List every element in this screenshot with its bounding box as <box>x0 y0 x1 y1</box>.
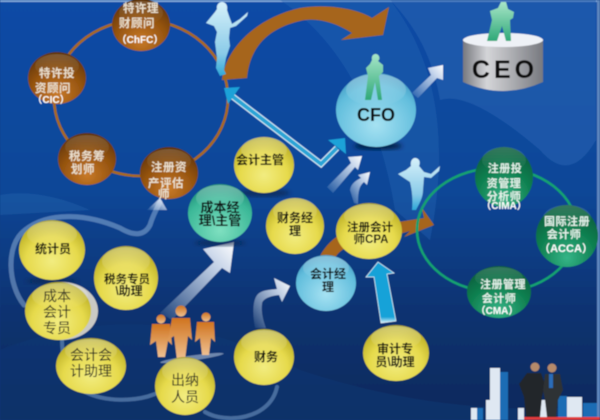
node: accounting assistant: 计助理 <box>70 363 112 379</box>
node: tax specialist: \助理 <box>115 284 143 298</box>
brown curved arrow to CEO <box>222 6 389 80</box>
node: asset appraiser <box>140 147 198 201</box>
node: CIMA: 资管理 <box>487 176 521 190</box>
node: CMA: 注册管理 <box>480 277 526 291</box>
node: tax planner <box>58 133 116 185</box>
node: finance manager: 财务经 <box>277 210 313 225</box>
node: auditor: 审计专 <box>377 341 413 356</box>
ring: brown planner certifications <box>54 20 228 176</box>
people icon <box>150 306 224 365</box>
city and businessmen <box>471 362 600 420</box>
businessman left <box>519 362 545 417</box>
node: CPA: 注册会计 <box>347 220 393 234</box>
light blue zigzag arrow <box>224 87 346 164</box>
node: CIMA: 分析师 <box>487 189 521 203</box>
node: accounting assistant <box>56 338 126 394</box>
node: tax specialist: 税务专员 <box>104 272 150 286</box>
node: finance manager: 理 <box>289 224 301 238</box>
node: tax specialist <box>94 246 158 310</box>
node: CIC <box>28 52 86 106</box>
node: CMA: （CMA） <box>476 305 518 317</box>
node: CIMA: （CIMA） <box>481 200 527 212</box>
node: ACCA: 国际注册 <box>544 214 590 228</box>
node: cashier: 人员 <box>171 389 199 405</box>
figure on CFO <box>365 54 383 100</box>
businessman right <box>543 364 563 417</box>
node: asset appraiser: 师 <box>158 188 170 201</box>
CEO cylinder: CEO <box>472 56 538 84</box>
CFO sphere: CFO <box>357 105 395 125</box>
node: cashier: 出纳 <box>171 372 199 388</box>
node: CIC: 资顾问 <box>35 81 71 95</box>
node: accounting assistant: 会计会 <box>70 347 112 363</box>
node: statistician <box>19 220 85 284</box>
blue up arrow to CPA <box>366 262 396 323</box>
node: cashier <box>155 357 215 415</box>
node: CPA <box>336 203 402 259</box>
node: finance <box>234 329 294 385</box>
node: ChFC <box>112 0 170 51</box>
node: cost specialist: 会计 <box>43 304 71 320</box>
node: CIC: 特许投 <box>39 66 75 80</box>
node: auditor: 员\助理 <box>375 355 415 369</box>
node: CMA <box>467 266 531 318</box>
node: accounting supervisor <box>234 137 294 197</box>
node: tax planner: 划师 <box>71 162 95 176</box>
ring: green management certifications <box>417 168 577 292</box>
node: accounting manager: 理 <box>322 280 334 294</box>
node: ChFC: 财顾问 <box>119 16 155 30</box>
node: CPA: 师CPA <box>354 233 388 246</box>
node: accounting manager <box>296 255 356 311</box>
node: finance: 财务 <box>254 349 278 364</box>
node: accounting manager: 会计经 <box>310 266 346 281</box>
node: finance manager <box>266 198 324 254</box>
white arrows <box>147 65 443 328</box>
node: cost manager <box>188 184 252 246</box>
node: accounting supervisor: 会计主管 <box>236 152 284 167</box>
node: CIMA: 注册投 <box>488 161 522 175</box>
node: ChFC: 特许理 <box>123 1 159 15</box>
node: cost specialist: 专员 <box>43 320 71 336</box>
node: statistician: 统计员 <box>35 241 71 256</box>
CFO sphere <box>336 54 416 150</box>
node: ACCA <box>536 205 598 267</box>
node: tax planner: 税务筹 <box>69 149 105 163</box>
node: auditor <box>363 325 429 381</box>
node: CIC: （CIC） <box>32 94 70 106</box>
node: ACCA: 会计师 <box>547 227 581 241</box>
node: asset appraiser: 产评估 <box>148 176 184 190</box>
CEO cylinder <box>463 2 543 91</box>
swoosh ribbons lower-left <box>11 202 277 418</box>
woman silhouette right <box>398 158 440 210</box>
node: asset appraiser: 注册资 <box>151 160 187 174</box>
node: CMA: 会计师 <box>482 291 516 305</box>
figure on CEO <box>487 2 514 41</box>
woman silhouette top <box>206 2 248 76</box>
node: cost specialist <box>25 282 98 340</box>
node: ACCA: （ACCA） <box>539 242 593 255</box>
node: cost manager: 成本经 <box>200 200 240 215</box>
node: ChFC: （ChFC） <box>117 34 163 46</box>
node: cost specialist: 成本 <box>43 288 71 304</box>
brown arrow to international ring <box>320 208 434 258</box>
node: cost manager: 理\主管 <box>199 213 241 228</box>
node: CIMA <box>475 147 533 212</box>
